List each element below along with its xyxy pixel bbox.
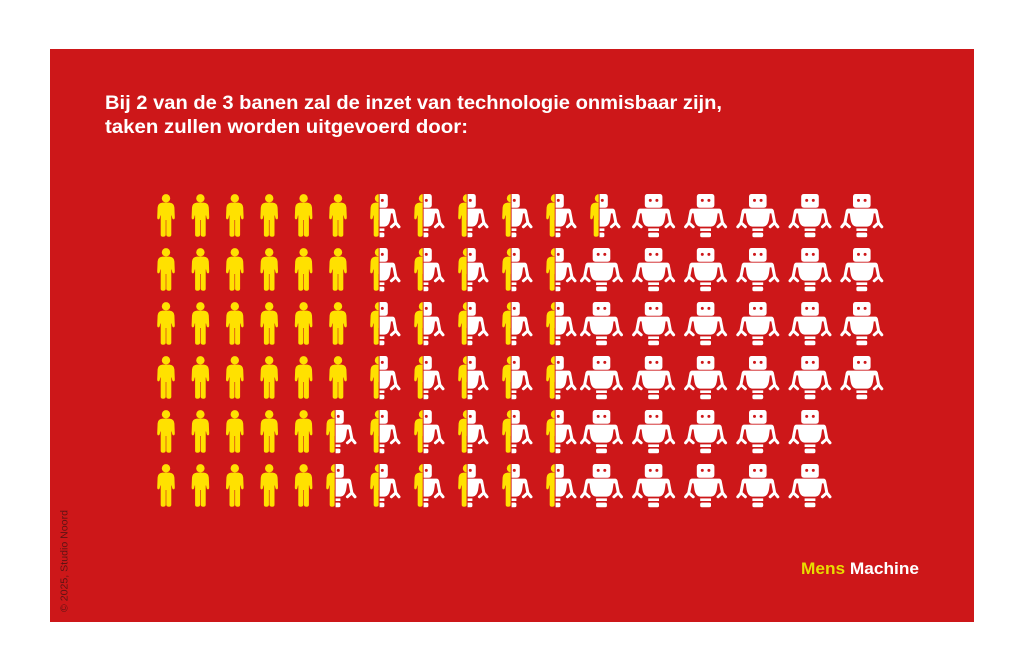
legend: Mens Machine [801,560,919,578]
copyright credit: © 2025, Studio Noord [60,510,70,612]
pictogram chart: people, hybrids and robots [157,194,882,507]
row 4: 6 people, 5 hybrids, 6 robots [157,356,882,399]
row 1: 6 people, 6 hybrids, 5 robots [157,194,882,237]
title: Bij 2 van de 3 banen zal de inzet van technologie onmisbaar zijn, [105,92,722,114]
title [105,92,722,138]
row 2: 6 people, 5 hybrids, 6 robots [157,248,882,291]
title: taken zullen worden uitgevoerd door: [105,116,468,138]
row 5: 5 people, 6 hybrids, 5 robots [157,410,830,453]
row 3: 6 people, 5 hybrids, 6 robots [157,302,882,345]
panel: red background [50,49,974,622]
row 6: 5 people, 6 hybrids, 5 robots [157,464,830,507]
